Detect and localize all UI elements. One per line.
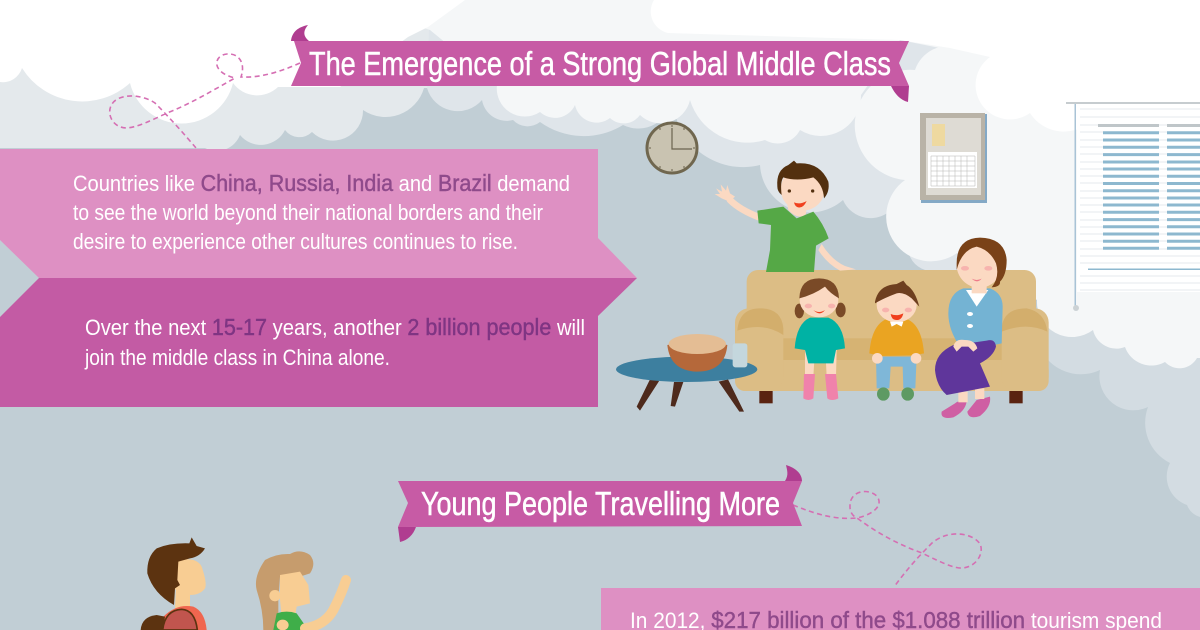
panel: tourism spend [601,588,1200,630]
coffee table with bowl and glass [616,334,757,412]
text block: countries: to see the world beyond their national borders and their [73,200,543,225]
illustration: young travellers [141,537,346,630]
mother [935,238,1007,418]
ribbon: Young People Travelling More [398,465,802,542]
text block: countries: desire to experience other cultures continues to rise. [73,229,518,254]
text block: countries: Countries like China, Russia, India and Brazil demand [73,170,570,196]
girl [795,278,846,400]
icon: window blinds [1066,102,1200,311]
ribbon: The Emergence of a Strong Global Middle Class [291,25,909,102]
dashed flight path: lower [793,492,981,587]
panel: light pink arrow panel [0,149,637,278]
panel: dark pink arrow panel [0,278,637,407]
text block: two billion: join the middle class in China alone. [84,345,390,370]
heading: Young People Travelling More [421,485,780,522]
boy with backpack [141,537,207,630]
text block: two billion: Over the next 15-17 years, another 2 billion people will [85,314,585,340]
sofa [735,270,1049,403]
icon: notice board with calendar [920,113,987,203]
text block: two billion [84,314,585,370]
illustration: family on sofa [616,161,1049,418]
heading: The Emergence of a Strong Global Middle Class [309,45,891,82]
girl waving [256,551,346,630]
icon: wall clock [647,123,697,173]
text block: countries [73,170,570,254]
boy [869,281,924,401]
father [715,161,856,272]
dashed flight path: top [110,54,300,148]
